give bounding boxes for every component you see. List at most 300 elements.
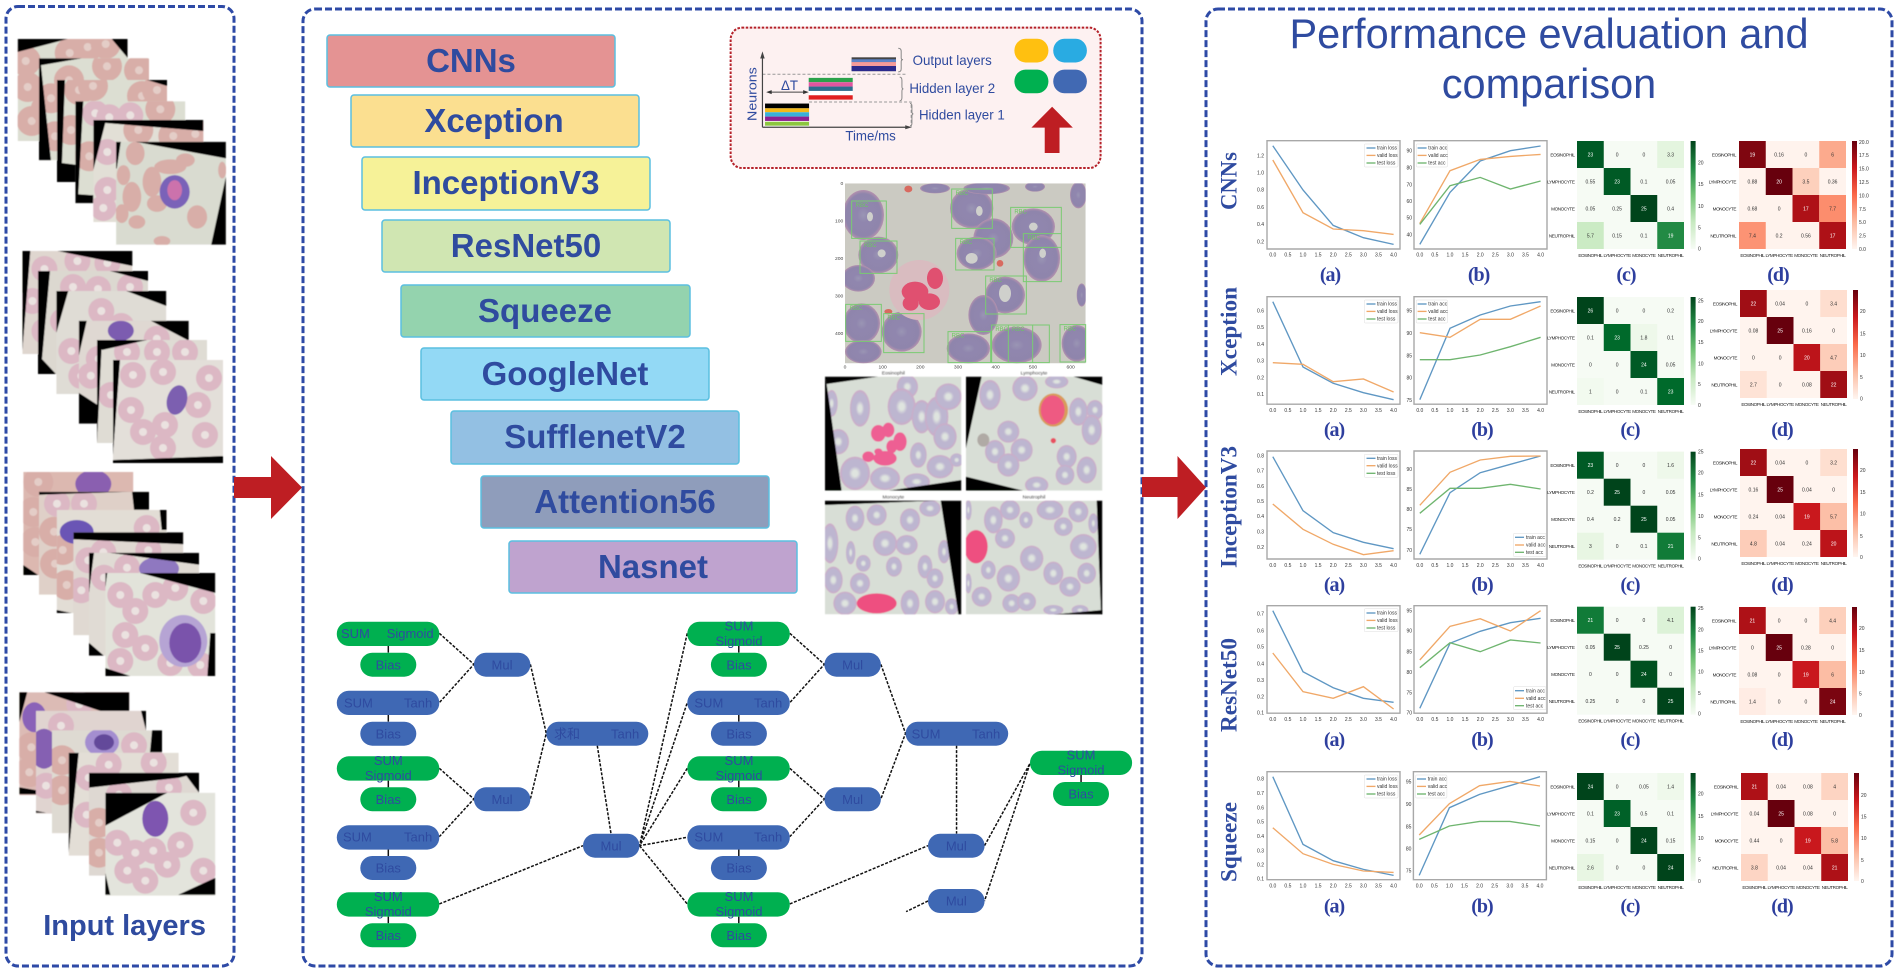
row 3 chart b: accuracy: 85 <box>1406 487 1412 493</box>
row 2 heatmap d: 0.16 <box>1802 328 1812 334</box>
row 3 heatmap d: 5 <box>1860 534 1863 540</box>
row 3 heatmap d: 15 <box>1860 490 1866 496</box>
row 5 heatmap d: EOSINOPHIL <box>1714 784 1739 789</box>
row 4 heatmap c: 10 <box>1698 670 1704 676</box>
node: mul lower right: Mul <box>842 792 863 807</box>
row 2 chart a: loss: valid loss <box>1377 309 1398 315</box>
detection image with RBC boxes: RBC <box>995 327 1009 333</box>
row 1 heatmap c: 15 <box>1698 182 1704 188</box>
row 5 heatmap d: NEUTROPHIL <box>1712 865 1739 870</box>
row 3 heatmap d: 0 <box>1860 555 1863 561</box>
row 4 chart a: loss: test loss <box>1377 626 1396 632</box>
row 5 heatmap d: 0.08 <box>1803 784 1813 790</box>
row 1 heatmap d: 17 <box>1830 233 1836 239</box>
row 2 heatmap d: NEUTROPHIL <box>1821 402 1847 407</box>
row 5 heatmap d: 21 <box>1752 784 1757 790</box>
node row: second column sigmoid 1: SUM <box>725 618 753 634</box>
row 4 heatmap d: EOSINOPHIL <box>1740 719 1765 724</box>
row 1 heatmap c: 23 <box>1614 179 1620 185</box>
row 1 heatmap d: NEUTROPHIL <box>1820 253 1846 258</box>
row 5 chart a: loss: 2.0 <box>1330 884 1337 890</box>
row 4 chart a: loss: 3.5 <box>1375 717 1382 723</box>
node row: tanh 1: SUM <box>344 696 373 710</box>
row 4 heatmap d: 1.4 <box>1749 699 1756 705</box>
arrow: models to evaluation <box>1142 456 1206 519</box>
node: mul right: Mul <box>946 838 967 853</box>
row 1 chart a: loss: 3.5 <box>1375 253 1382 259</box>
row 5 chart a: loss: 1.0 <box>1300 884 1307 890</box>
row 3 chart a: loss: 0.2 <box>1257 545 1264 551</box>
node row: sigmoid 1: SUM <box>341 626 370 641</box>
row 5 chart a: loss: 0.8 <box>1257 777 1264 783</box>
row 5 heatmap c: 10 <box>1698 836 1704 842</box>
row 2 heatmap c: 0.05 <box>1666 362 1676 368</box>
row 3 chart b: accuracy: valid acc <box>1526 543 1546 549</box>
row 3 chart b: accuracy: 2.5 <box>1492 563 1499 569</box>
row 2 heatmap c: LYMPHOCYTE <box>1547 335 1575 340</box>
row 4 chart a: loss: 0.4 <box>1257 662 1264 668</box>
row 5 heatmap c: 0.05 <box>1639 784 1649 790</box>
row 4 heatmap c: 0 <box>1669 645 1672 651</box>
row 2 chart b: accuracy: 95 <box>1406 309 1412 315</box>
row 4 heatmap c: MONOCYTE <box>1632 719 1656 724</box>
row 1 chart b: accuracy: train acc <box>1428 146 1448 152</box>
row 5 captions: (c) <box>1620 896 1640 918</box>
neuron and time axes <box>760 51 912 129</box>
row 5 heatmap c: 0.1 <box>1587 811 1594 817</box>
row 5 heatmap c: 15 <box>1698 814 1704 820</box>
row 3 chart a: loss: 3.5 <box>1375 563 1382 569</box>
row 4 heatmap d: 21 <box>1750 618 1755 624</box>
row 2 heatmap c: 23 <box>1614 335 1620 341</box>
row 3 heatmap c: 15 <box>1698 493 1704 499</box>
row 2 chart b: accuracy: 3.5 <box>1522 408 1529 414</box>
row 2 heatmap c: EOSINOPHIL <box>1550 308 1575 313</box>
row 4 chart a: loss: 0.5 <box>1284 717 1292 723</box>
image: eosinophil: Eosinophil <box>882 370 905 376</box>
detection image with RBC boxes: RBC <box>864 243 877 249</box>
row 3 chart b: accuracy: 1.0 <box>1447 563 1454 569</box>
row 3 heatmap c: 23 <box>1588 463 1593 469</box>
row 5 heatmap d: LYMPHOCYTE <box>1767 885 1795 890</box>
model: GoogleNet <box>421 348 709 400</box>
row 5 heatmap d: 20 <box>1861 793 1867 799</box>
row 2 heatmap d: 22 <box>1751 301 1756 307</box>
row 4 chart a: loss: 0.6 <box>1257 629 1264 635</box>
row 2 chart b: accuracy: 75 <box>1406 398 1412 404</box>
row 5 heatmap d: 0.04 <box>1803 865 1813 871</box>
row 2 heatmap c: 1.8 <box>1640 335 1648 341</box>
row 1 heatmap d: 20.0 <box>1859 140 1869 146</box>
row 3 chart a: loss: 2.5 <box>1345 563 1352 569</box>
row 5 chart a: loss: train loss <box>1377 777 1398 783</box>
row 2 heatmap c: 5 <box>1698 382 1701 388</box>
row 3 heatmap d: NEUTROPHIL <box>1821 561 1847 566</box>
row 5 heatmap c: NEUTROPHIL <box>1549 865 1575 870</box>
node row: sigmoid 2: Sigmoid <box>365 768 412 783</box>
row 1 heatmap d: NEUTROPHIL <box>1710 233 1737 238</box>
row 4 chart a: loss: 1.5 <box>1315 717 1322 723</box>
row 2 captions: (c) <box>1620 419 1640 441</box>
row 3 heatmap c: 3 <box>1589 544 1592 550</box>
node: sum tanh right: Tanh <box>972 726 1000 741</box>
row 1 chart a: loss: 0.5 <box>1284 253 1292 259</box>
node row: second column sigmoid 1: Bias <box>726 657 752 672</box>
row 5 chart a: loss: 0.3 <box>1257 849 1264 855</box>
row 4 chart a: loss: 0.3 <box>1257 678 1264 684</box>
row 5 heatmap d: 0.04 <box>1776 784 1786 790</box>
row 4 chart b: accuracy: 2.5 <box>1492 717 1499 723</box>
model: Nasnet: Nasnet <box>598 548 708 585</box>
row 5 chart a: loss: 0.0 <box>1269 884 1276 890</box>
row 4 captions: (b) <box>1471 729 1493 751</box>
row 5 chart a: loss: 2.5 <box>1345 884 1352 890</box>
row 1 chart a: loss: 2.0 <box>1330 253 1337 259</box>
row 2 chart a: loss: 3.5 <box>1375 408 1382 414</box>
row 2 heatmap c: 0 <box>1643 308 1646 314</box>
row 4 chart b: accuracy: 0.0 <box>1416 717 1423 723</box>
row 5 chart b: accuracy: 2.5 <box>1491 884 1498 890</box>
row 1 heatmap d: 0.2 <box>1776 233 1783 239</box>
row 3 chart b: accuracy: 1.5 <box>1462 563 1469 569</box>
row 1 chart b: accuracy: 3.0 <box>1507 253 1514 259</box>
node: mul upper left: Mul <box>492 657 513 672</box>
graph connections <box>388 633 1081 923</box>
node row: sigmoid 2: SUM <box>374 753 403 768</box>
row 1 chart a: loss: 1.5 <box>1315 253 1322 259</box>
row 5 chart a: loss: 0.4 <box>1257 834 1264 840</box>
row 3 chart a: loss <box>1257 451 1400 569</box>
row 2 heatmap d: MONOCYTE <box>1714 355 1737 360</box>
row 3 captions: (b) <box>1471 574 1493 596</box>
row 5 chart a: loss: 3.0 <box>1360 884 1367 890</box>
row 1 chart a: loss: train loss <box>1377 146 1398 152</box>
row 2 heatmap c: 1 <box>1589 389 1592 395</box>
row 2 heatmap c: 25 <box>1698 298 1704 304</box>
row 4 heatmap c: 24 <box>1641 672 1647 678</box>
row 2 heatmap d: 20 <box>1804 355 1810 361</box>
row 2 chart a: loss: 0.4 <box>1257 342 1264 348</box>
row 1 heatmap d: LYMPHOCYTE <box>1765 253 1793 258</box>
row 2 heatmap d: 2.7 <box>1750 382 1757 388</box>
row 3 heatmap d: NEUTROPHIL <box>1711 541 1738 546</box>
row 4 chart a: loss <box>1257 606 1400 723</box>
node row: second column sigmoid 2: Sigmoid <box>716 768 762 783</box>
row 3 heatmap d: 19 <box>1804 514 1810 520</box>
node: output sigmoid: Bias <box>1068 787 1094 802</box>
row 5 heatmap c: MONOCYTE <box>1632 885 1656 890</box>
row 3 heatmap c: 0 <box>1616 544 1619 550</box>
row 1 chart b: accuracy: 60 <box>1406 199 1412 205</box>
node row: tanh 2 <box>337 825 439 880</box>
row 4 chart a: loss: 0.1 <box>1257 711 1264 717</box>
row 1 heatmap d: 0.56 <box>1801 233 1811 239</box>
row 2 chart b: accuracy: 3.0 <box>1507 408 1514 414</box>
node: mul lower right <box>824 787 881 811</box>
row 2 heatmap c: 24 <box>1641 362 1647 368</box>
model: InceptionV3: InceptionV3 <box>412 164 600 201</box>
row 1 heatmap c: 19 <box>1668 233 1674 239</box>
label: output layers: Output layers <box>913 52 992 68</box>
row 3 heatmap d: LYMPHOCYTE <box>1766 561 1794 566</box>
row 1 heatmap d: 0 <box>1805 152 1808 158</box>
row 3 heatmap d: 0.04 <box>1775 514 1785 520</box>
row 5 chart b: accuracy: test acc <box>1428 792 1445 798</box>
row 2 heatmap d: 4.7 <box>1830 355 1837 361</box>
node row: tanh 2: SUM <box>343 830 372 845</box>
row 1 heatmap d: EOSINOPHIL <box>1740 253 1765 258</box>
row 1 heatmap c: 0.4 <box>1667 206 1674 212</box>
row 5 heatmap d: 0.44 <box>1750 838 1759 844</box>
row 4 heatmap d: EOSINOPHIL <box>1712 618 1737 623</box>
node row: second column sigmoid 2: SUM <box>725 753 753 768</box>
row 5 chart b: accuracy: 1.0 <box>1446 884 1453 890</box>
row 2 heatmap d: 0.08 <box>1802 382 1812 388</box>
row 3 heatmap c: MONOCYTE <box>1551 517 1575 522</box>
row 5 chart b: accuracy: 0.5 <box>1431 884 1438 890</box>
row 3 heatmap c: 0 <box>1698 557 1701 563</box>
row 1 heatmap c: 20 <box>1698 160 1704 166</box>
row 5 heatmap c: 0.15 <box>1666 838 1676 844</box>
row 3 chart b: accuracy: test acc <box>1526 550 1544 556</box>
panel: network models <box>303 9 1142 966</box>
row 1 chart b: accuracy: 90 <box>1406 149 1412 155</box>
row 3 heatmap c: 0 <box>1643 490 1646 496</box>
row 2 heatmap d: LYMPHOCYTE <box>1766 402 1794 407</box>
row 5 heatmap d: 0.04 <box>1750 811 1759 817</box>
row 3 chart a: loss: test loss <box>1377 471 1396 477</box>
detection image with RBC boxes: RBC <box>960 240 973 246</box>
row 4 heatmap d: 0 <box>1805 618 1808 624</box>
row 5 heatmap c: 24 <box>1588 784 1593 790</box>
row 1 heatmap d: 17.5 <box>1859 153 1869 159</box>
row 5 heatmap d: 21 <box>1832 865 1838 871</box>
row 2 heatmap d: EOSINOPHIL <box>1713 301 1738 306</box>
row 2 heatmap c: 0.1 <box>1667 335 1674 341</box>
node row: second column tanh 2: SUM <box>694 830 723 845</box>
row 3 heatmap c: 25 <box>1698 450 1704 456</box>
model: Attention56 <box>481 476 769 528</box>
row 1 heatmap d: 12.5 <box>1859 180 1869 186</box>
row 4 heatmap c: 0 <box>1643 618 1646 624</box>
row 1 chart b: accuracy <box>1406 141 1547 259</box>
row 4 chart b: accuracy: 80 <box>1406 670 1412 676</box>
image: monocyte: Monocyte <box>883 495 904 501</box>
row 4 heatmap c: 0 <box>1698 712 1701 718</box>
row 4 heatmap d: 6 <box>1831 672 1834 678</box>
row 4 chart b: accuracy: 70 <box>1406 711 1412 717</box>
row 4 chart a: loss: valid loss <box>1377 618 1398 624</box>
row 1 chart b: accuracy: 40 <box>1406 233 1412 239</box>
row 5 heatmap c: 0.1 <box>1667 811 1674 817</box>
row 2 heatmap d: 3.4 <box>1830 301 1837 307</box>
row 2 chart b: accuracy: 2.0 <box>1477 408 1484 414</box>
node: mul lower left <box>474 787 530 811</box>
node row: second column sigmoid 3: SUM <box>725 889 753 904</box>
row 1 chart b: accuracy: 0.0 <box>1416 253 1423 259</box>
detection image with RBC boxes: 0 <box>844 364 847 370</box>
row 1 heatmap c: 0 <box>1616 152 1619 158</box>
row 3 chart a: loss: 0.4 <box>1257 514 1264 520</box>
row 2 heatmap c: EOSINOPHIL <box>1578 409 1603 414</box>
detection image with RBC boxes: 200 <box>835 256 844 262</box>
row 5 heatmap d: 15 <box>1861 814 1867 820</box>
detection image with RBC boxes: RBC <box>1014 209 1028 215</box>
row 2 heatmap d: 22 <box>1831 382 1837 388</box>
image: monocyte <box>822 495 961 617</box>
row 3 chart b: accuracy: 4.0 <box>1537 563 1544 569</box>
row 4 heatmap c: NEUTROPHIL <box>1549 699 1575 704</box>
row 2 chart b: accuracy: 85 <box>1406 354 1412 360</box>
row 4 heatmap d: 0 <box>1778 699 1781 705</box>
image stack 3 <box>18 467 216 678</box>
row 2 heatmap d: 25 <box>1777 328 1783 334</box>
row 2 chart a: loss: 0.3 <box>1257 359 1264 365</box>
row 1 heatmap d: 15.0 <box>1859 166 1869 172</box>
row 4 heatmap c: 4.1 <box>1667 618 1674 624</box>
node: mul lower left: Mul <box>492 792 513 807</box>
row 2 heatmap d: 0 <box>1779 382 1782 388</box>
image: neutrophil: Neutrophil <box>1023 495 1045 501</box>
row 5 chart b: accuracy <box>1406 772 1546 890</box>
row 1 captions: (c) <box>1616 264 1636 286</box>
row 2 heatmap d: 0.08 <box>1749 328 1758 334</box>
row 2 heatmap d: 0 <box>1752 355 1755 361</box>
row 4 heatmap d: 10 <box>1859 670 1865 676</box>
label: hidden layer 1: Hidden layer 1 <box>919 107 1005 122</box>
row 5 heatmap c: 24 <box>1668 865 1674 871</box>
detection image with RBC boxes: 100 <box>879 364 887 370</box>
row 3 heatmap d: 0.24 <box>1802 541 1812 547</box>
model: ResNet50: ResNet50 <box>451 227 601 264</box>
row 5 heatmap c: 0 <box>1616 784 1619 790</box>
title: Performance evaluation and <box>1289 10 1809 57</box>
row label: CNNs: CNNs <box>1216 152 1242 210</box>
row 2 heatmap c: 15 <box>1698 340 1704 346</box>
arrow: input to models <box>234 456 302 519</box>
row 2 captions: (d) <box>1771 419 1793 441</box>
node row: second column sigmoid 3: Bias <box>726 928 752 943</box>
row 1 heatmap c: 5 <box>1698 226 1701 232</box>
row 4 chart a: loss: 0.0 <box>1269 717 1276 723</box>
row 1 heatmap c: EOSINOPHIL <box>1578 253 1603 258</box>
row 4 heatmap c: 25 <box>1614 645 1620 651</box>
row 3 chart a: loss: 0.7 <box>1257 468 1264 474</box>
row 5 chart b: accuracy: valid acc <box>1428 784 1448 790</box>
node: mul right <box>928 834 985 858</box>
row 4 heatmap d: 20 <box>1859 626 1865 632</box>
row 4 heatmap d: NEUTROPHIL <box>1710 699 1737 704</box>
row 5 captions: (b) <box>1471 896 1493 918</box>
row 5 chart b: accuracy: 90 <box>1406 802 1412 808</box>
row 5 heatmap c <box>1547 773 1704 890</box>
row 2 chart a: loss: 2.5 <box>1345 408 1352 414</box>
row 5 heatmap c: 0 <box>1698 879 1701 885</box>
row 1 chart b: accuracy: 80 <box>1406 166 1412 172</box>
detection image with RBC boxes: RBC <box>887 315 901 321</box>
node row: second column tanh 1: SUM <box>694 696 723 710</box>
row 4 chart a: loss: 1.0 <box>1300 717 1307 723</box>
model: Xception <box>351 95 639 147</box>
row 4 heatmap d: NEUTROPHIL <box>1820 719 1846 724</box>
row 2 chart b: accuracy: 1.5 <box>1462 408 1469 414</box>
row 1 chart a: loss <box>1257 141 1400 259</box>
row 4 heatmap d: 0 <box>1831 645 1834 651</box>
node row: second column tanh 1: Bias <box>726 726 752 741</box>
image: lymphocyte: Lymphocyte <box>1021 370 1048 376</box>
row 2 heatmap d: 0 <box>1832 328 1835 334</box>
row 5 chart a: loss <box>1257 772 1400 890</box>
image: lymphocyte <box>966 370 1103 493</box>
row 4 chart a: loss: train loss <box>1377 611 1398 617</box>
row 1 chart a: loss: test loss <box>1377 161 1396 167</box>
row 4 heatmap d: 0 <box>1778 672 1781 678</box>
detection image with RBC boxes: 400 <box>992 364 1000 370</box>
row 2 heatmap c: MONOCYTE <box>1551 362 1575 367</box>
row 5 chart b: accuracy: 75 <box>1406 869 1412 875</box>
row 1 heatmap c: NEUTROPHIL <box>1549 233 1575 238</box>
node row: tanh 1 <box>337 691 439 746</box>
row 1 captions: (b) <box>1468 264 1490 286</box>
row 1 heatmap c: 0.15 <box>1612 233 1622 239</box>
row 4 heatmap c: 0 <box>1616 672 1619 678</box>
detection image with RBC boxes: RBC <box>1027 235 1041 241</box>
row 3 chart b: accuracy: 75 <box>1406 527 1412 533</box>
row 2 heatmap d: 20 <box>1860 309 1866 315</box>
row 1 captions: (a) <box>1320 264 1340 286</box>
row 2 heatmap c: 0 <box>1616 389 1619 395</box>
row 4 chart b: accuracy: 75 <box>1406 691 1412 697</box>
node: mul bottom right: Mul <box>946 894 967 909</box>
row 1 chart b: accuracy: 70 <box>1406 183 1412 189</box>
row 2 heatmap d: 0 <box>1860 396 1863 402</box>
row 3 heatmap d <box>1710 449 1866 566</box>
row 5 chart a: loss: 1.5 <box>1315 884 1322 890</box>
node row: tanh 2: Tanh <box>404 830 432 845</box>
row 2 heatmap c: NEUTROPHIL <box>1658 409 1684 414</box>
row 1 chart b: accuracy: 1.5 <box>1462 253 1469 259</box>
legend pills <box>1014 39 1087 93</box>
row 3 chart b: accuracy: 80 <box>1406 507 1412 513</box>
row 1 chart b: accuracy: 0.5 <box>1431 253 1439 259</box>
row 1 heatmap d: 20 <box>1776 179 1782 185</box>
row 4 chart b: accuracy: 90 <box>1406 629 1412 635</box>
row 5 chart a: loss: test loss <box>1377 792 1396 798</box>
row 1 heatmap d: EOSINOPHIL <box>1712 152 1737 157</box>
row 4 heatmap c: NEUTROPHIL <box>1658 719 1684 724</box>
row 3 chart a: loss: 0.3 <box>1257 530 1264 536</box>
row 2 chart b: accuracy: 90 <box>1406 331 1412 337</box>
row 2 chart a: loss: 0.5 <box>1257 325 1264 331</box>
row 2 chart b: accuracy: 80 <box>1406 376 1412 382</box>
row 4 heatmap c: 21 <box>1588 618 1593 624</box>
row 2 chart a: loss: test loss <box>1377 317 1396 323</box>
row 5 chart b: accuracy: 2.0 <box>1476 884 1483 890</box>
row 2 heatmap c: 0.1 <box>1640 389 1648 395</box>
row 1 heatmap d: MONOCYTE <box>1713 206 1736 211</box>
row 3 heatmap c: 21 <box>1668 544 1674 550</box>
row 5 captions: (d) <box>1771 896 1793 918</box>
row 5 captions: (a) <box>1324 896 1344 918</box>
row 3 heatmap d: EOSINOPHIL <box>1713 460 1738 465</box>
model: Squeeze <box>401 285 690 337</box>
row 2 chart b: accuracy: train acc <box>1428 302 1448 308</box>
row 3 captions: (c) <box>1620 574 1640 596</box>
image stack 2 <box>19 248 223 463</box>
node: mul upper right: Mul <box>842 657 863 672</box>
output layer spikes <box>852 57 896 71</box>
detection image with RBC boxes: 0 <box>841 181 844 187</box>
